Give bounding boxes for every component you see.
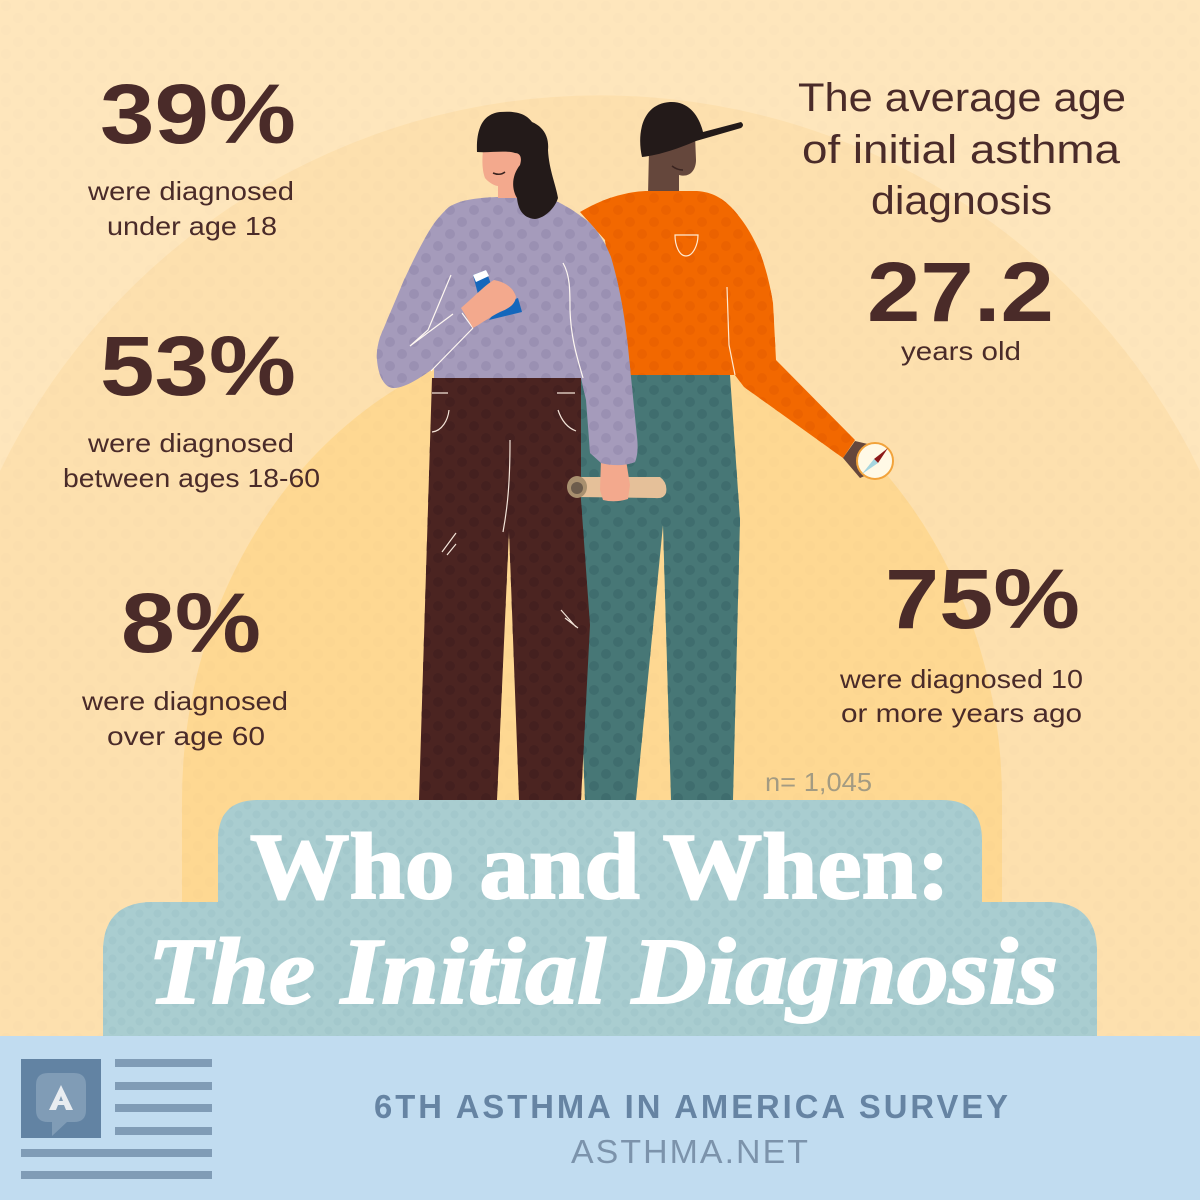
woman: head and hair [477,112,558,219]
stat: 8% over age 60: over age 60 [107,721,265,751]
website: ASTHMA.NET [571,1133,810,1170]
stat: 53% ages 18-60: between ages 18-60 [63,463,320,493]
stat: 75% diagnosed 10+ years ago: were diagnosed 10 [839,664,1083,694]
man: hand holding compass [843,441,893,479]
stat: 75% diagnosed 10+ years ago: or more years ago [841,698,1082,728]
title line 1: Who and When: [250,815,950,919]
sample size note: n= 1,045 [765,767,872,797]
title line 2: The Initial Diagnosis [148,920,1058,1024]
logo: newspaper icon [21,1059,212,1179]
stat: 8% over age 60: 8% [121,576,261,670]
heading: average age: The average age [798,76,1126,120]
stat: 75% diagnosed 10+ years ago [839,552,1083,728]
illustration: two people [377,102,893,800]
survey name: 6TH ASTHMA IN AMERICA SURVEY [374,1088,1011,1125]
stat: 27.2 years old: years old [901,336,1021,366]
footer band [0,1036,1200,1200]
man: orange sweater [580,191,855,458]
heading: average age: diagnosis [871,179,1052,223]
woman: inhaler and hand [461,270,522,328]
stat: 39% under age 18: under age 18 [107,211,277,241]
woman: brown pants [419,378,590,800]
stat: 53% ages 18-60: were diagnosed [87,428,294,458]
stat: 39% under age 18: were diagnosed [87,176,294,206]
stat: 27.2 years old: 27.2 [867,245,1054,339]
stat: 27.2 years old [867,245,1054,366]
stat: 8% over age 60 [81,576,288,751]
stat: 8% over age 60: were diagnosed [81,686,288,716]
stat: 75% diagnosed 10+ years ago: 75% [885,552,1080,646]
stat: 53% ages 18-60 [63,319,320,493]
man: teal pants [578,375,740,800]
heading: average age: of initial asthma [802,128,1121,172]
woman: lilac sweater [377,197,638,465]
heading: average age [798,76,1126,223]
stat: 39% under age 18 [87,67,296,241]
man: head and cap [640,102,743,195]
stat: 39% under age 18: 39% [100,67,296,161]
stat: 53% ages 18-60: 53% [100,319,296,413]
woman: scroll in hand [567,460,666,501]
title banner [103,800,1097,1036]
